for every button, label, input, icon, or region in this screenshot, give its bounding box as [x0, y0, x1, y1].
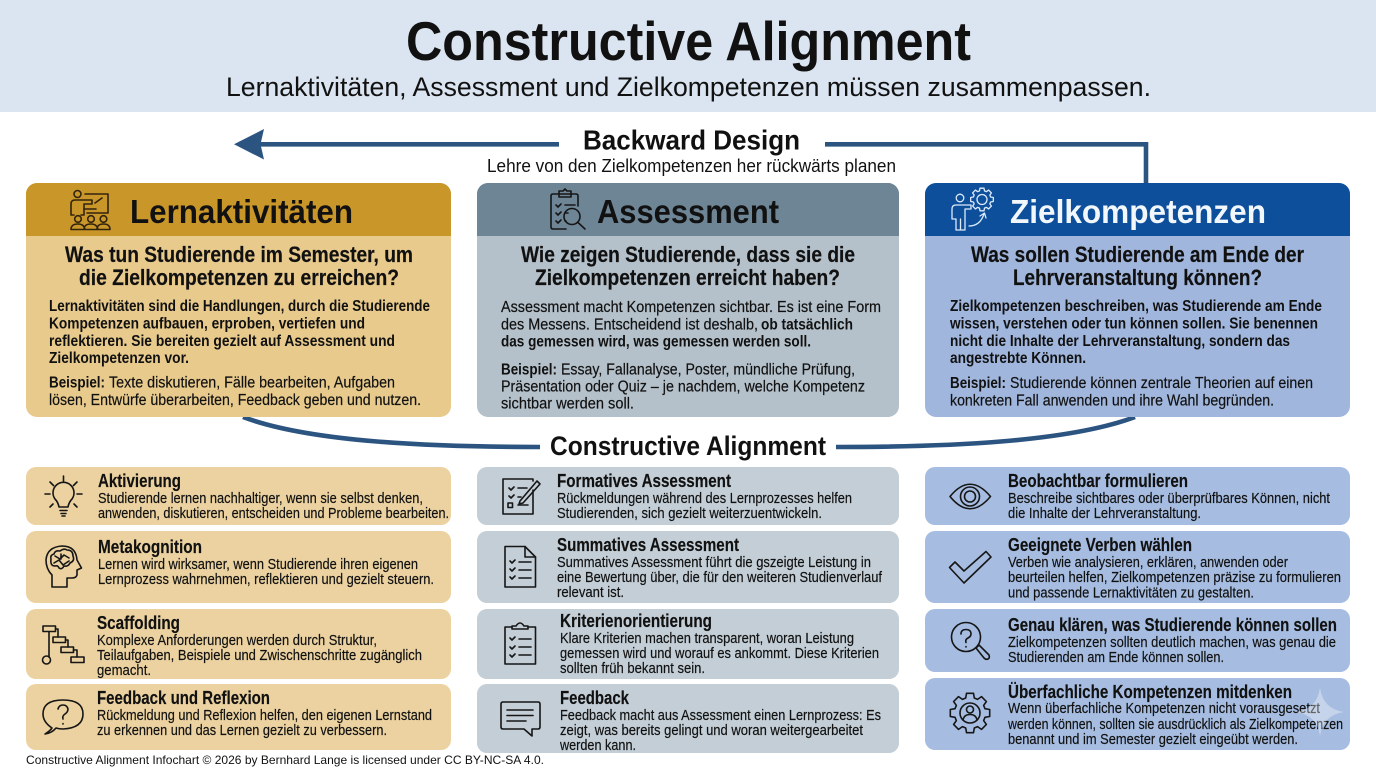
card: Feedback: Feedback: [560, 688, 630, 708]
card: Summatives Assessment: eine Bewertung über, die für den weiteren Studienverlauf: [557, 569, 883, 586]
icon: message bubble: [501, 702, 540, 736]
heading: Zielkompetenzen: [1010, 194, 1266, 231]
definition text: reflektieren. Sie bereiten gezielt auf Assessment und: [49, 333, 395, 350]
card: Überfachliche Kompetenzen: [925, 678, 1350, 750]
card: Scaffolding: Scaffolding: [97, 613, 180, 633]
card: Genau klären: [925, 609, 1350, 672]
card: Summatives Assessment: Summatives Assessment führt die gszeigte Leistung in: [557, 554, 871, 571]
question: [971, 242, 1304, 290]
panel: Assessment: [477, 183, 899, 417]
card: Aktivierung: anwenden, diskutieren, entscheiden und Probleme bearbeiten.: [98, 505, 449, 522]
question: Zielkompetenzen erreicht haben?: [535, 265, 840, 290]
card: Kriterienorientierung: [477, 609, 899, 679]
icon: question magnifier: [952, 622, 989, 659]
question: Was tun Studierende im Semester, um: [65, 242, 413, 267]
heading: Assessment: [597, 194, 779, 231]
heading: backward design: Backward Design: [583, 124, 800, 156]
card: Metakognition: [26, 531, 451, 603]
heading: constructive alignment: Constructive Alignment: [550, 431, 826, 461]
card: Summatives Assessment: [477, 531, 899, 603]
icon: document checklist: [505, 546, 536, 587]
card: Beobachtbar formulieren: Beschreibe sichtbares oder überprüfbares Können, nicht: [1008, 490, 1331, 507]
card: Metakognition: Metakognition: [98, 537, 202, 557]
example text: Studierende können zentrale Theorien auf einen: [1010, 375, 1313, 392]
definition text: Zielkompetenzen beschreiben, was Studierende am Ende: [950, 298, 1322, 315]
heading: Lernaktivitäten: [130, 194, 353, 231]
example text: Beispiel:: [49, 374, 105, 392]
title: Constructive Alignment: [406, 10, 971, 72]
card: Beobachtbar formulieren: die Inhalte der Lehrveranstaltung.: [1008, 505, 1201, 522]
card: Geeignete Verben wählen: [925, 531, 1350, 603]
icon: eye: [950, 484, 990, 509]
icon: person with gear: [952, 188, 993, 230]
card: Kriterienorientierung: Kriterienorientierung: [560, 611, 712, 631]
card: Scaffolding: Komplexe Anforderungen werden durch Struktur,: [97, 632, 377, 649]
header band: [0, 0, 1376, 112]
example text: lösen, Entwürfe überarbeiten, Feedback geben und nutzen.: [49, 392, 421, 409]
card: Geeignete Verben wählen: Verben wie analysieren, erklären, anwenden oder: [1008, 554, 1288, 571]
card: Aktivierung: [26, 467, 451, 525]
definition text: Zielkompetenzen vor.: [49, 350, 189, 367]
card: Geeignete Verben wählen: Geeignete Verben wählen: [1008, 535, 1192, 555]
card: Metakognition: Lernen wird wirksamer, wenn Studierende ihren eigenen: [98, 556, 418, 573]
question: Lehrveranstaltung können?: [1013, 265, 1262, 290]
example text: Texte diskutieren, Fälle bearbeiten, Aufgaben: [109, 374, 395, 392]
icon: checklist with pencil: [503, 479, 540, 514]
question: [521, 242, 855, 290]
question: die Zielkompetenzen zu erreichen?: [79, 265, 399, 290]
card: Formatives Assessment: [477, 467, 899, 525]
card: Aktivierung: Studierende lernen nachhaltiger, wenn sie selbst denken,: [98, 490, 423, 507]
subtitle: Lernaktivitäten, Assessment und Zielkompetenzen müssen zusammenpassen.: [226, 72, 1151, 102]
card: Genau klären: Studierenden am Ende können sollen.: [1008, 649, 1224, 666]
definition text: [49, 298, 430, 367]
card: Feedback und Reflexion: Rückmeldung und Reflexion helfen, den eigenen Lernstand: [97, 707, 432, 724]
question: Was sollen Studierende am Ende der: [971, 242, 1304, 267]
icon: speech bubble with question mark: [43, 700, 83, 734]
card: Feedback und Reflexion: [26, 684, 451, 750]
icon: light bulb: [45, 476, 82, 516]
card: Metakognition: Lernprozess wahrnehmen, reflektieren und gezielt steuern.: [98, 571, 434, 588]
example text: konkreten Fall anwenden und ihre Wahl begründen.: [950, 392, 1274, 410]
card: Überfachliche Kompetenzen: Überfachliche Kompetenzen mitdenken: [1008, 682, 1292, 702]
definition text: wissen, verstehen oder tun können sollen. Sie benennen: [949, 316, 1318, 332]
definition text: Lernaktivitäten sind die Handlungen, durch die Studierende: [49, 298, 430, 315]
card: Summatives Assessment: relevant ist.: [557, 584, 624, 601]
definition text: des Messens. Entscheidend ist deshalb,: [501, 316, 758, 334]
panel: Zielkompetenzen: [925, 183, 1350, 417]
card: Feedback und Reflexion: Feedback und Reflexion: [97, 688, 270, 708]
example text: Präsentation oder Quiz – je nachdem, welche Kompetenz: [501, 378, 865, 396]
card: Feedback: Feedback macht aus Assessment einen Lernprozess: Es: [560, 707, 881, 724]
icon: teacher with students: [71, 190, 110, 230]
definition text: Kompetenzen aufbauen, erproben, vertiefen und: [49, 316, 365, 332]
arrows: constructive alignment connector: [243, 417, 1135, 447]
card: Scaffolding: gemacht.: [97, 662, 151, 679]
definition text: das gemessen wird, was gemessen werden soll.: [501, 334, 811, 350]
question: Wie zeigen Studierende, dass sie die: [521, 242, 855, 267]
card: Überfachliche Kompetenzen: Wenn überfachliche Kompetenzen nicht vorausgesetzt: [1008, 700, 1321, 717]
card: Formatives Assessment: Formatives Assessment: [557, 471, 731, 491]
definition text: ob tatsächlich: [761, 316, 853, 334]
card: Feedback: werden kann.: [559, 737, 636, 754]
example text: Beispiel:: [950, 375, 1006, 392]
card: Aktivierung: Aktivierung: [98, 471, 181, 491]
watermark sparkle: [1296, 688, 1344, 736]
card: Scaffolding: [26, 609, 451, 679]
card: Scaffolding: Teilaufgaben, Beispiele und Zwischenschritte zugänglich: [97, 647, 422, 664]
card: Kriterienorientierung: sollten früh bekannt sein.: [560, 660, 705, 677]
icon: clipboard checklist: [505, 623, 536, 664]
example text: [950, 375, 1313, 410]
card: Kriterienorientierung: gemessen wird und worauf es ankommt. Diese Kriterien: [560, 645, 879, 662]
heading: backward design: [487, 124, 896, 176]
icon: check mark: [950, 552, 991, 583]
card: Geeignete Verben wählen: und passende Lernaktivitäten zu gestalten.: [1008, 584, 1254, 602]
example text: Essay, Fallanalyse, Poster, mündliche Prüfung,: [561, 362, 855, 378]
definition text: [501, 299, 881, 350]
card: Überfachliche Kompetenzen: benannt und im Semester gezielt eingeübt werden.: [1008, 731, 1298, 748]
panel: Lernaktivitäten: [26, 183, 451, 417]
card: Feedback: [477, 684, 899, 754]
example text: [501, 362, 865, 412]
card: Beobachtbar formulieren: [925, 467, 1350, 525]
example text: Beispiel:: [501, 362, 557, 378]
icon: gear with person: [950, 693, 990, 733]
heading: backward design: Lehre von den Zielkompetenzen her rückwärts planen: [487, 155, 896, 176]
definition text: Assessment macht Kompetenzen sichtbar. Es ist eine Form: [501, 299, 881, 316]
arrow: backward design: [234, 129, 1146, 184]
definition text: nicht die Inhalte der Lehrveranstaltung, sondern das: [950, 333, 1290, 350]
icon: head with brain: [46, 546, 82, 587]
definition text: angestrebte Können.: [950, 350, 1086, 367]
card: Summatives Assessment: Summatives Assessment: [557, 535, 739, 555]
example text: [49, 374, 421, 409]
footer credit: Constructive Alignment Infochart © 2026 by Bernhard Lange is licensed under CC BY-NC-SA 4.0.: [26, 753, 544, 767]
question: [65, 242, 413, 290]
card: Formatives Assessment: Rückmeldungen während des Lernprozesses helfen: [557, 490, 852, 507]
icon: scaffold steps: [42, 626, 84, 664]
example text: sichtbar werden soll.: [501, 396, 634, 412]
card: Kriterienorientierung: Klare Kriterien machen transparent, woran Leistung: [560, 630, 854, 647]
definition text: [949, 298, 1322, 367]
card: Feedback: zeigt, was bereits gelingt und woran weitergearbeitet: [560, 722, 864, 739]
card: Beobachtbar formulieren: Beobachtbar formulieren: [1008, 471, 1188, 491]
icon: clipboard with magnifier: [551, 189, 585, 229]
card: Feedback und Reflexion: zu erkennen und das Lernen gezielt zu verbessern.: [97, 722, 387, 739]
card: Formatives Assessment: Studierenden, sich gezielt weiterzuentwickeln.: [557, 505, 822, 522]
